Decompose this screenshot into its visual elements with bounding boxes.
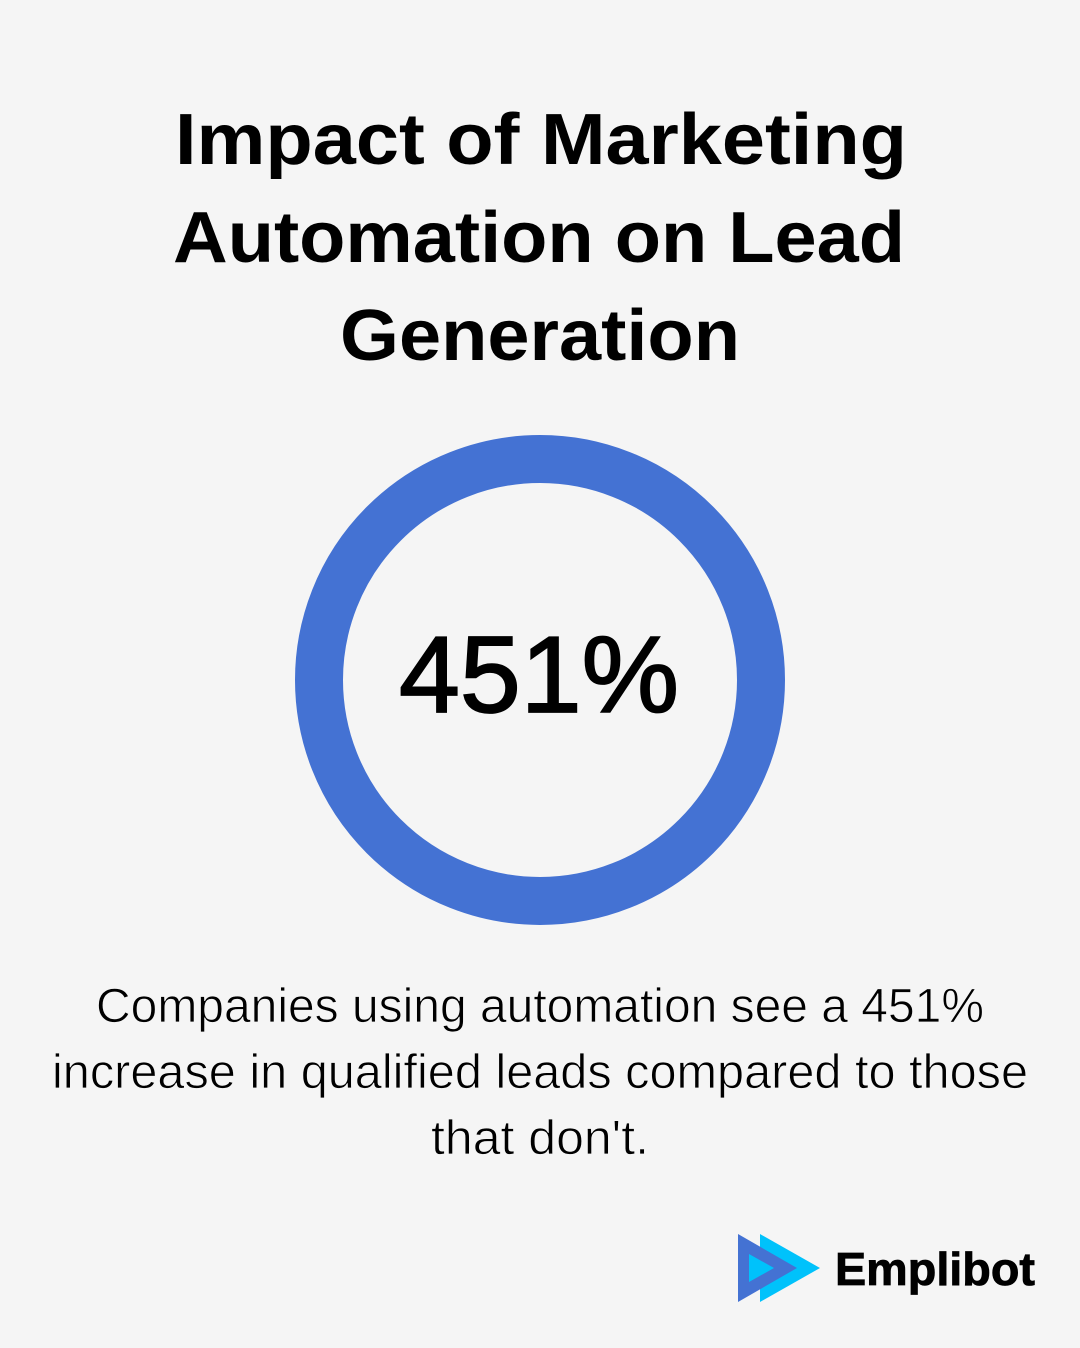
description: Companies using automation see a 451% (96, 980, 984, 1033)
donut ring (319, 459, 761, 901)
title: Impact of Marketing (175, 100, 907, 180)
description (52, 980, 1028, 1165)
logo wordmark: Emplibot (835, 1243, 1035, 1295)
description: increase in qualified leads compared to those (52, 1046, 1028, 1099)
description: that don't. (431, 1112, 649, 1165)
logo (738, 1234, 1035, 1302)
stat value: 451% (399, 614, 679, 736)
title: Automation on Lead (173, 198, 905, 278)
title: Generation (340, 296, 740, 376)
icon: play triangles (738, 1234, 820, 1302)
title (173, 100, 907, 376)
